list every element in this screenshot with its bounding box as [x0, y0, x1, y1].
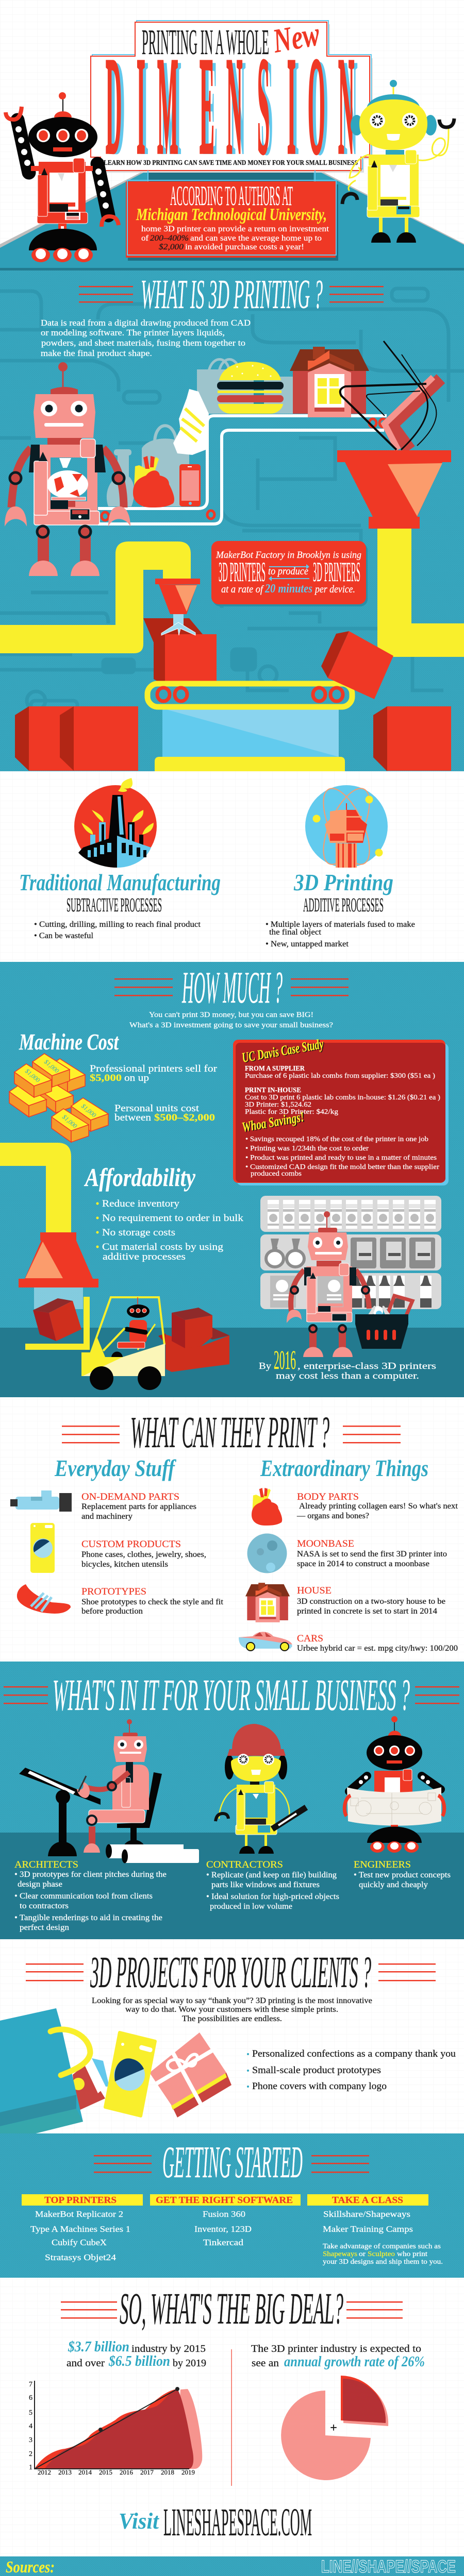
panel: what is 3D printing [0, 270, 464, 771]
text block: explanation [41, 318, 251, 358]
callout: MakerBot factory: 20 minutes [264, 582, 312, 596]
panel: 3D projects for your clients [0, 1947, 456, 2133]
arrows between labels [269, 564, 309, 581]
panel: UC Davis case study: produced combs [251, 1170, 302, 1178]
chart: growth pie: + [330, 2421, 337, 2435]
chart: growth pie [281, 2376, 388, 2480]
item: house: 3D construction on a two-story house to be [297, 1597, 445, 1606]
text: by 2016 [259, 1346, 436, 1381]
panel: UC Davis case study [233, 1036, 449, 1185]
title sign: LEARN HOW 3D PRINTING CAN SAVE TIME AND MONEY FOR YOUR SMALL BUSINESS [104, 159, 358, 167]
robot: contractor [216, 1724, 306, 1854]
panel: UC Davis case study: • Savings recouped 18% of the cost of the printer in one job [245, 1136, 428, 1143]
text block: traditional bullets: • Cutting, drilling, milling to reach final product [34, 920, 201, 929]
panel: how much [0, 962, 464, 1397]
robot: architect at drafting table [19, 1719, 162, 1856]
text block: architects: • Clear communication tool from clients [14, 1892, 153, 1901]
robot: red and black [6, 92, 119, 262]
subheadings [54, 1455, 428, 1481]
icon: house [290, 347, 369, 417]
chart: industry growth area: 3 [29, 2436, 32, 2444]
intro text: You can't print 3D money, but you can save BIG! [149, 1011, 313, 1019]
callout: MakerBot factory: to produce [268, 566, 308, 577]
falling red box [33, 1298, 81, 1341]
intro paragraph [92, 1996, 372, 2023]
text block: architects: ARCHITECTS [14, 1859, 78, 1870]
text block: affordability bullets: additive processes [103, 1251, 186, 1262]
intro paragraph: Looking for as special way to say “thank you”? 3D printing is the most innovative [92, 1996, 372, 2005]
heading: affordability: Affordability [84, 1163, 196, 1192]
text: industry value: $3.7 billion [68, 2339, 129, 2355]
background pipe pattern [0, 289, 464, 711]
heading: traditional manufacturing [19, 869, 221, 916]
text: industry value: and over [67, 2358, 105, 2369]
text block: project bullets: Personalized confections as a company thank you [252, 2048, 456, 2059]
red callout: Michigan Tech: in avoided purchase costs a year! [185, 243, 304, 251]
chart: industry growth area: 2012 [38, 2468, 51, 2476]
text block: traditional bullets: • Can be wasteful [34, 931, 94, 940]
text block: explanation: powders, and sheet materials, fusing them together to [41, 338, 245, 348]
icon: money stacks large [9, 1054, 85, 1117]
column: top printers [22, 2194, 143, 2262]
text: industry value: $6.5 billion [108, 2353, 170, 2369]
text: personal units: Personal units cost [114, 1103, 200, 1114]
heading: traditional manufacturing: Traditional Manufacturing [19, 869, 221, 895]
text: industry value: by 2019 [173, 2358, 206, 2369]
item: house: HOUSE [297, 1585, 332, 1596]
chart: industry growth area: 2013 [58, 2468, 72, 2476]
yellow pipe and dispenser [0, 1143, 98, 1309]
icon: phone [179, 464, 201, 506]
robot: yellow [342, 80, 454, 243]
printed objects [107, 347, 369, 507]
text block: engineers: ENGINEERS [354, 1859, 411, 1870]
icon: factory [74, 778, 157, 868]
item: moonbase: MOONBASE [297, 1538, 354, 1549]
callout: MakerBot factory: 3D PRINTERS [219, 556, 266, 587]
text block: architects: to contractors [20, 1902, 69, 1910]
item: prototypes [17, 1584, 224, 1616]
item: on-demand parts [10, 1490, 196, 1521]
panel: hero [0, 15, 464, 270]
text: growth rate: annual growth rate of 26% [284, 2354, 425, 2370]
text block: contractors: • Ideal solution for high-priced objects [206, 1892, 339, 1901]
call to action: visit site [119, 2501, 312, 2544]
chart: industry growth area: 2 [29, 2450, 32, 2458]
conveyor and stand [147, 684, 352, 771]
chart: industry growth area: 6 [29, 2394, 32, 2402]
column: top printers: Cubify CubeX [52, 2238, 107, 2247]
chart: industry growth area: 7 [29, 2381, 32, 2388]
chart: industry growth area [29, 2381, 202, 2476]
text block: affordability bullets: Reduce inventory [102, 1198, 180, 1209]
text block: architects: perfect design [20, 1923, 69, 1932]
text block: engineers: • Test new product concepts [354, 1871, 451, 1879]
subheadings: Everyday Stuff [54, 1455, 177, 1481]
column: get the right software: GET THE RIGHT SOFTWARE [156, 2195, 293, 2205]
tipping red box [321, 631, 393, 699]
text block: contractors [206, 1859, 339, 1911]
item: custom products: Phone cases, clothes, jewelry, shoes, [81, 1550, 206, 1559]
text block: contractors: CONTRACTORS [206, 1859, 283, 1870]
text block: explanation: Data is read from a digital drawing produced from CAD [41, 318, 251, 328]
intro paragraph: The possibilities are endless. [182, 2014, 282, 2023]
forklift with robot [25, 1297, 165, 1390]
text: professional printers: Professional printers sell for [90, 1063, 218, 1074]
title sign: DIMENSION [109, 30, 358, 184]
item: custom products [30, 1523, 206, 1573]
icon: shopping bag [197, 360, 293, 414]
column: get the right software: Tinkercad [203, 2238, 244, 2247]
text block: affordability bullets [96, 1198, 244, 1262]
conveyor belts [98, 416, 387, 524]
text block: 3D printing bullets: • New, untapped market [266, 940, 349, 948]
intro paragraph: way to do that. Wow your customers with these simple prints. [125, 2005, 338, 2014]
icon: white wing-like part [173, 389, 209, 455]
icon: phone case [105, 2032, 155, 2116]
title sign: New [270, 15, 323, 60]
icon: money stacks small [52, 1098, 108, 1142]
section background [0, 1662, 464, 1939]
text block: affordability bullets: No requirement to order in bulk [102, 1213, 244, 1224]
item: custom products: bicycles, kitchen utensils [81, 1560, 168, 1569]
icon: money stacks large: $1,000 [24, 1067, 41, 1084]
text block: project bullets [247, 2048, 456, 2092]
text: industry value [67, 2339, 206, 2369]
panel: footer [0, 2556, 464, 2576]
panel: what can they print [10, 1407, 458, 1653]
call to action: visit site: Visit [119, 2509, 160, 2534]
icon: teal shopping bag [0, 2008, 90, 2133]
column: get the right software [150, 2194, 301, 2247]
panel: UC Davis case study: • Product was printed and ready to use in a matter of minutes [245, 1154, 437, 1162]
chart: industry growth area: 2015 [99, 2468, 112, 2476]
column: take a class: who print [397, 2250, 427, 2258]
icon: gift box [150, 2032, 231, 2117]
chart: industry growth area: 4 [29, 2422, 32, 2430]
yellow pipes [0, 529, 464, 657]
callout: MakerBot factory [211, 541, 368, 606]
column: take a class: or [359, 2250, 366, 2258]
callout: MakerBot factory: at a rate of [221, 584, 264, 595]
red callout: Michigan Tech: home 3D printer can provide a return on investment [141, 225, 329, 233]
red callout: Michigan Tech [126, 180, 338, 261]
panel: UC Davis case study: Purchase of 6 plastic lab combs from supplier: $300 ($51 ea ) [245, 1072, 435, 1080]
red callout: Michigan Tech: $2,000 [159, 243, 184, 251]
robot: pink builder [5, 362, 130, 576]
red callout: Michigan Tech: 200–400% [150, 234, 189, 243]
chart: industry growth area: 5 [29, 2409, 32, 2417]
text block: affordability bullets: No storage costs [102, 1227, 175, 1238]
red callout: Michigan Tech: Michigan Technological University, [136, 206, 327, 224]
text block: project bullets: Small-scale product prototypes [252, 2065, 381, 2076]
text block: architects: design phase [18, 1880, 62, 1889]
icon: lunchbox [72, 2058, 109, 2111]
item: custom products: CUSTOM PRODUCTS [81, 1539, 181, 1550]
panel: UC Davis case study: • Printing was 1/234th the cost to order [245, 1145, 369, 1153]
text block: explanation: or modeling software. The printer layers liquids, [41, 328, 225, 337]
column: take a class: Skillshare/Shapeways [323, 2209, 410, 2219]
item: prototypes: before production [81, 1607, 143, 1616]
text block: architects [14, 1859, 167, 1932]
icon: atom tower [305, 782, 388, 871]
icon: shopping basket [355, 1296, 412, 1349]
stacked boxes [158, 1308, 229, 1372]
icon: bottle and lock [107, 426, 189, 506]
item: body parts [252, 1488, 458, 1526]
chart: industry growth area: 2017 [140, 2468, 154, 2476]
item: body parts: Already printing collagen ears! So what's next [299, 1502, 458, 1511]
column: take a class: TAKE A CLASS [332, 2195, 403, 2205]
heading: how much: HOW MUCH ? [182, 963, 283, 1013]
text block: contractors: • Replicate (and keep on file) building [206, 1871, 337, 1879]
text: by 2016: By [259, 1361, 271, 1371]
text: by 2016: 2016 [274, 1346, 296, 1375]
chart: industry growth area: 2016 [120, 2468, 133, 2476]
item: prototypes: Shoe prototypes to check the style and fit [81, 1598, 224, 1606]
heading: sources: Sources: [6, 2557, 55, 2576]
panel: UC Davis case study: FROM A SUPPLIER [245, 1065, 305, 1073]
text: by 2016: may cost less than a computer. [276, 1370, 419, 1381]
text: personal units [114, 1103, 215, 1123]
panel: UC Davis case study: Whoa Savings! [241, 1109, 305, 1135]
item: cars: CARS [297, 1633, 323, 1644]
chart: industry growth area: 1 [29, 2464, 32, 2471]
text: personal units: $500–$2,000 [154, 1112, 215, 1123]
text block: project bullets: Phone covers with company logo [252, 2081, 387, 2092]
divider [231, 2349, 232, 2486]
title sign: DIMENSION [106, 29, 354, 183]
item: moonbase: NASA is set to send the first 3D printer into [297, 1550, 447, 1558]
column: take a class [307, 2194, 443, 2266]
column: take a class: your 3D designs and ship them to you. [323, 2258, 443, 2266]
heading: 3D printing [293, 869, 393, 916]
robot: engineer with blueprint [344, 1716, 444, 1853]
text block: engineers: quickly and cheaply [359, 1880, 428, 1889]
store shelves [260, 1196, 441, 1309]
panel: traditional vs 3D [19, 778, 415, 948]
panel: so what's the big deal [29, 2283, 425, 2486]
item: on-demand parts: ON-DEMAND PARTS [81, 1492, 179, 1502]
text block: architects: • Tangible renderings to aid in creating the [14, 1913, 162, 1922]
panel: UC Davis case study: Plastic for 3D Printer: $42/kg [245, 1108, 338, 1116]
red callout: Michigan Tech: of [141, 234, 149, 243]
intro text: What's a 3D investment going to save your small business? [129, 1021, 333, 1029]
section background [0, 962, 464, 1397]
item: body parts: — organs and bones? [296, 1512, 369, 1520]
column: get the right software: Fusion 360 [203, 2209, 245, 2219]
teal section background [0, 270, 464, 771]
text: professional printers [90, 1063, 218, 1083]
item: on-demand parts: and machinery [81, 1512, 132, 1521]
text block: explanation: make the final product shape. [41, 348, 152, 358]
column: take a class: Shapeways [323, 2250, 357, 2258]
column: take a class: Take advantage of companies such as [323, 2243, 441, 2250]
text: growth rate [251, 2343, 425, 2370]
robot: pink shopper [287, 1211, 369, 1357]
text: by 2016: , enterprise-class 3D printers [297, 1361, 436, 1371]
item: body parts: BODY PARTS [297, 1492, 359, 1502]
panel: UC Davis case study: Cost to 3D print 6 plastic lab combs in-house: $1.26 ($0.21 ea ) [245, 1094, 440, 1101]
chart: industry growth area: 2018 [161, 2468, 174, 2476]
text block: traditional bullets [34, 920, 201, 940]
item: house: printed in concrete is set to start in 2014 [297, 1607, 437, 1616]
item: moonbase [247, 1533, 447, 1573]
text block: contractors: parts like windows and fixtures [211, 1880, 320, 1889]
column: get the right software: Inventor, 123D [194, 2224, 252, 2234]
panel: UC Davis case study: Whoa Savings! [242, 1109, 306, 1136]
text block: engineers [354, 1859, 451, 1889]
text block: 3D printing bullets: the final object [269, 928, 322, 937]
item: prototypes: PROTOTYPES [81, 1586, 146, 1597]
intro text [129, 1011, 333, 1029]
item: cars [239, 1632, 458, 1653]
text block: contractors: produced in low volume [210, 1902, 292, 1911]
chart: industry growth area: 2014 [78, 2468, 92, 2476]
icon: money stacks small: $1,000 [61, 1113, 78, 1130]
column: take a class: Sculpteo [368, 2250, 395, 2258]
icon: burger [217, 362, 284, 414]
text block: 3D printing bullets: • Multiple layers of materials fused to make [266, 920, 415, 929]
small nozzle and printed box [143, 579, 217, 686]
text: professional printers: $5,000 [90, 1073, 122, 1083]
text: growth rate: see an [252, 2358, 279, 2369]
text block: architects: • 3D prototypes for client pitches during the [14, 1870, 167, 1879]
text: industry value: industry by 2015 [131, 2343, 206, 2354]
footer background [0, 2556, 464, 2576]
robot arm and hopper [337, 341, 451, 529]
icon: heart [133, 456, 174, 507]
bottom red boxes [15, 706, 451, 771]
icon: paper rolls [106, 1844, 199, 1863]
column: top printers: MakerBot Replicator 2 [35, 2209, 123, 2219]
icon: money stacks small: $1,000 [80, 1103, 97, 1119]
heading: traditional manufacturing: SUBTRACTIVE PROCESSES [67, 894, 162, 916]
panel: getting started [0, 2133, 464, 2278]
icon: money stacks large: $1,000 [43, 1058, 60, 1075]
panel: UC Davis case study: UC Davis Case Study [241, 1036, 325, 1065]
teal stage floor [0, 170, 464, 270]
text: professional printers: on up [124, 1073, 149, 1083]
section background [0, 2133, 464, 2278]
panel: UC Davis case study: 3D Printer: $1,524.62 [245, 1101, 311, 1109]
item: house [245, 1583, 445, 1622]
text block: 3D printing bullets [266, 920, 415, 948]
heading: machine cost: Machine Cost [19, 1029, 119, 1055]
column: top printers: Stratasys Objet24 [45, 2252, 117, 2262]
red callout: Michigan Tech: and can save the average home up to [190, 234, 322, 243]
text block: affordability bullets: Cut material costs by using [102, 1242, 224, 1252]
panel: UC Davis case study: • Customized CAD design fit the mold better than the supplier [245, 1163, 439, 1171]
panel: UC Davis case study: UC Davis Case Study [242, 1036, 326, 1066]
chart: industry growth area: 2019 [181, 2468, 195, 2476]
heading: 3D printing: 3D Printing [293, 869, 393, 895]
column: top printers: TOP PRINTERS [44, 2195, 117, 2205]
panel: what's in it for your small business [0, 1662, 464, 1939]
callout: MakerBot factory: per device. [314, 584, 355, 595]
callout: MakerBot factory: MakerBot Factory in Brooklyn is using [216, 550, 361, 561]
text: personal units: between [114, 1112, 152, 1123]
item: cars: Urbee hybrid car = est. mpg city/hwy: 100/200 [297, 1644, 458, 1653]
panel: UC Davis case study: PRINT IN-HOUSE [245, 1087, 301, 1094]
text: growth rate: The 3D printer industry is expected to [251, 2343, 421, 2354]
column: top printers: Type A Machines Series 1 [30, 2224, 130, 2234]
column: take a class: Maker Training Camps [323, 2224, 413, 2234]
item: on-demand parts: Replacement parts for appliances [81, 1502, 196, 1511]
item: moonbase: space in 2014 to construct a moonbase [297, 1560, 429, 1568]
